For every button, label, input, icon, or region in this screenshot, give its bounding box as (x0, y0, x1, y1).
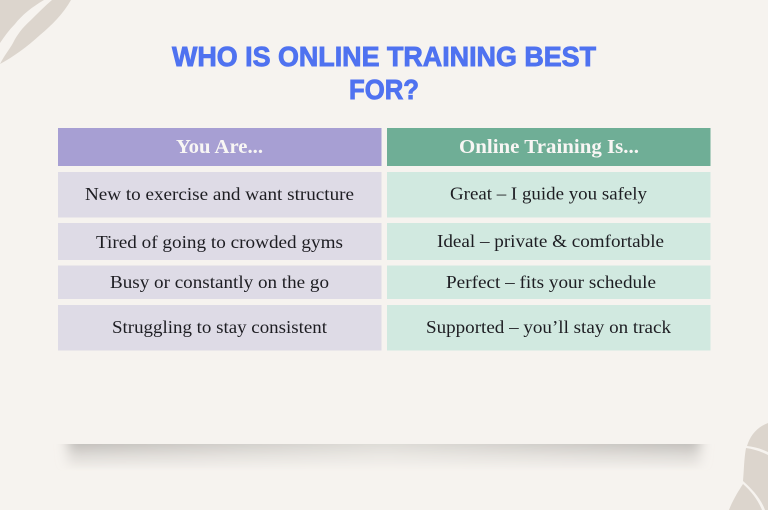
row 1 right (387, 172, 710, 218)
title: FOR? (349, 74, 419, 105)
row 3 right (387, 266, 710, 299)
row 4 left (58, 305, 382, 350)
row 3 right: Perfect – fits your schedule (446, 272, 656, 292)
row 3 left: Busy or constantly on the go (110, 272, 329, 292)
column header: You Are (58, 128, 382, 166)
row 1 right: Great – I guide you safely (450, 184, 647, 204)
title (172, 41, 596, 105)
table (58, 128, 710, 350)
title: WHO IS ONLINE TRAINING BEST (172, 41, 596, 72)
row 4 right (387, 305, 710, 350)
row 4 left: Struggling to stay consistent (112, 317, 327, 337)
row 2 left (58, 223, 382, 260)
row 2 right (387, 223, 710, 260)
row 1 left (58, 172, 382, 218)
decorative leaf: bottom right (729, 423, 768, 510)
row 4 right: Supported – you’ll stay on track (426, 317, 671, 337)
decorative leaf: top left (0, 0, 71, 64)
row 2 right: Ideal – private & comfortable (437, 231, 664, 251)
column header: Online Training Is: Online Training Is... (459, 136, 639, 158)
row 2 left: Tired of going to crowded gyms (96, 232, 343, 252)
column header: Online Training Is (387, 128, 710, 166)
column header: You Are: You Are... (176, 136, 263, 158)
drop shadow strip (62, 444, 706, 466)
row 1 left: New to exercise and want structure (85, 184, 354, 204)
row 3 left (58, 266, 382, 299)
